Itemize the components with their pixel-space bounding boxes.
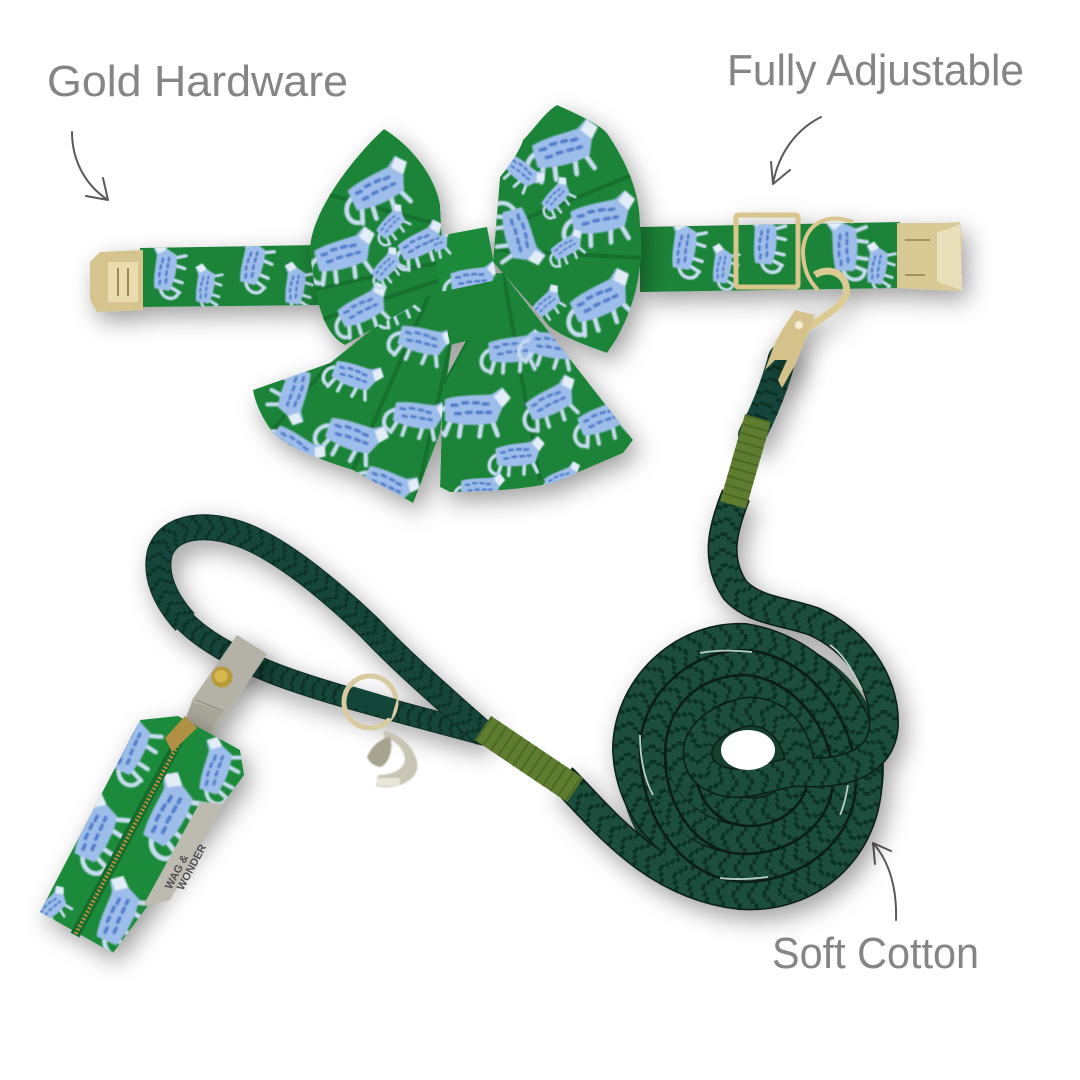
- slider buckle: [736, 215, 798, 287]
- bow: right wing: [486, 105, 645, 353]
- bow: left tail: [253, 277, 458, 517]
- rope leash: [158, 358, 884, 900]
- left buckle: [90, 250, 143, 312]
- olive thread wrap: lower: [483, 728, 575, 790]
- pouch: brass snap: [212, 666, 232, 688]
- bow: right tail: [435, 273, 639, 506]
- swivel clip: [765, 271, 847, 388]
- pouch: leather strap: [182, 635, 267, 745]
- arrow: to soft cotton rope: [873, 843, 896, 920]
- pouch: zipper: [75, 716, 197, 935]
- gold ring on leash: [344, 676, 396, 728]
- infographic canvas: [36, 54, 1022, 972]
- waste bag pouch: [26, 635, 267, 961]
- sailor bow: [253, 105, 645, 517]
- bow: centre knot: [433, 224, 512, 292]
- D ring: [803, 219, 853, 290]
- pouch: fabric body: [26, 707, 247, 961]
- heading: Gold Hardware: Gold Hardware: [47, 57, 348, 106]
- pouch: brand label: WAG &: [163, 853, 191, 891]
- rope: coil: [562, 495, 884, 900]
- arrow: to adjustable slider: [771, 117, 821, 184]
- bow: left wing: [301, 129, 454, 345]
- right buckle: [897, 222, 962, 291]
- pouch: brand label: [143, 802, 224, 906]
- collar: left band: [130, 234, 330, 313]
- moon charm: [367, 730, 417, 787]
- heading: Soft Cotton: Soft Cotton: [772, 929, 979, 978]
- arrow: to gold hardware: [72, 132, 108, 200]
- heading: Fully Adjustable: Fully Adjustable: [727, 46, 1024, 95]
- pouch: brand label: WONDER: [175, 842, 209, 892]
- collar: [90, 213, 962, 388]
- collar: right band: [640, 213, 905, 297]
- rope passing through ring: [350, 696, 394, 709]
- olive thread wrap: upper: [733, 418, 758, 505]
- bow: centre join below knot: [437, 273, 505, 345]
- rope: top end near clip: [752, 358, 782, 435]
- rope: handle loop: [158, 527, 485, 735]
